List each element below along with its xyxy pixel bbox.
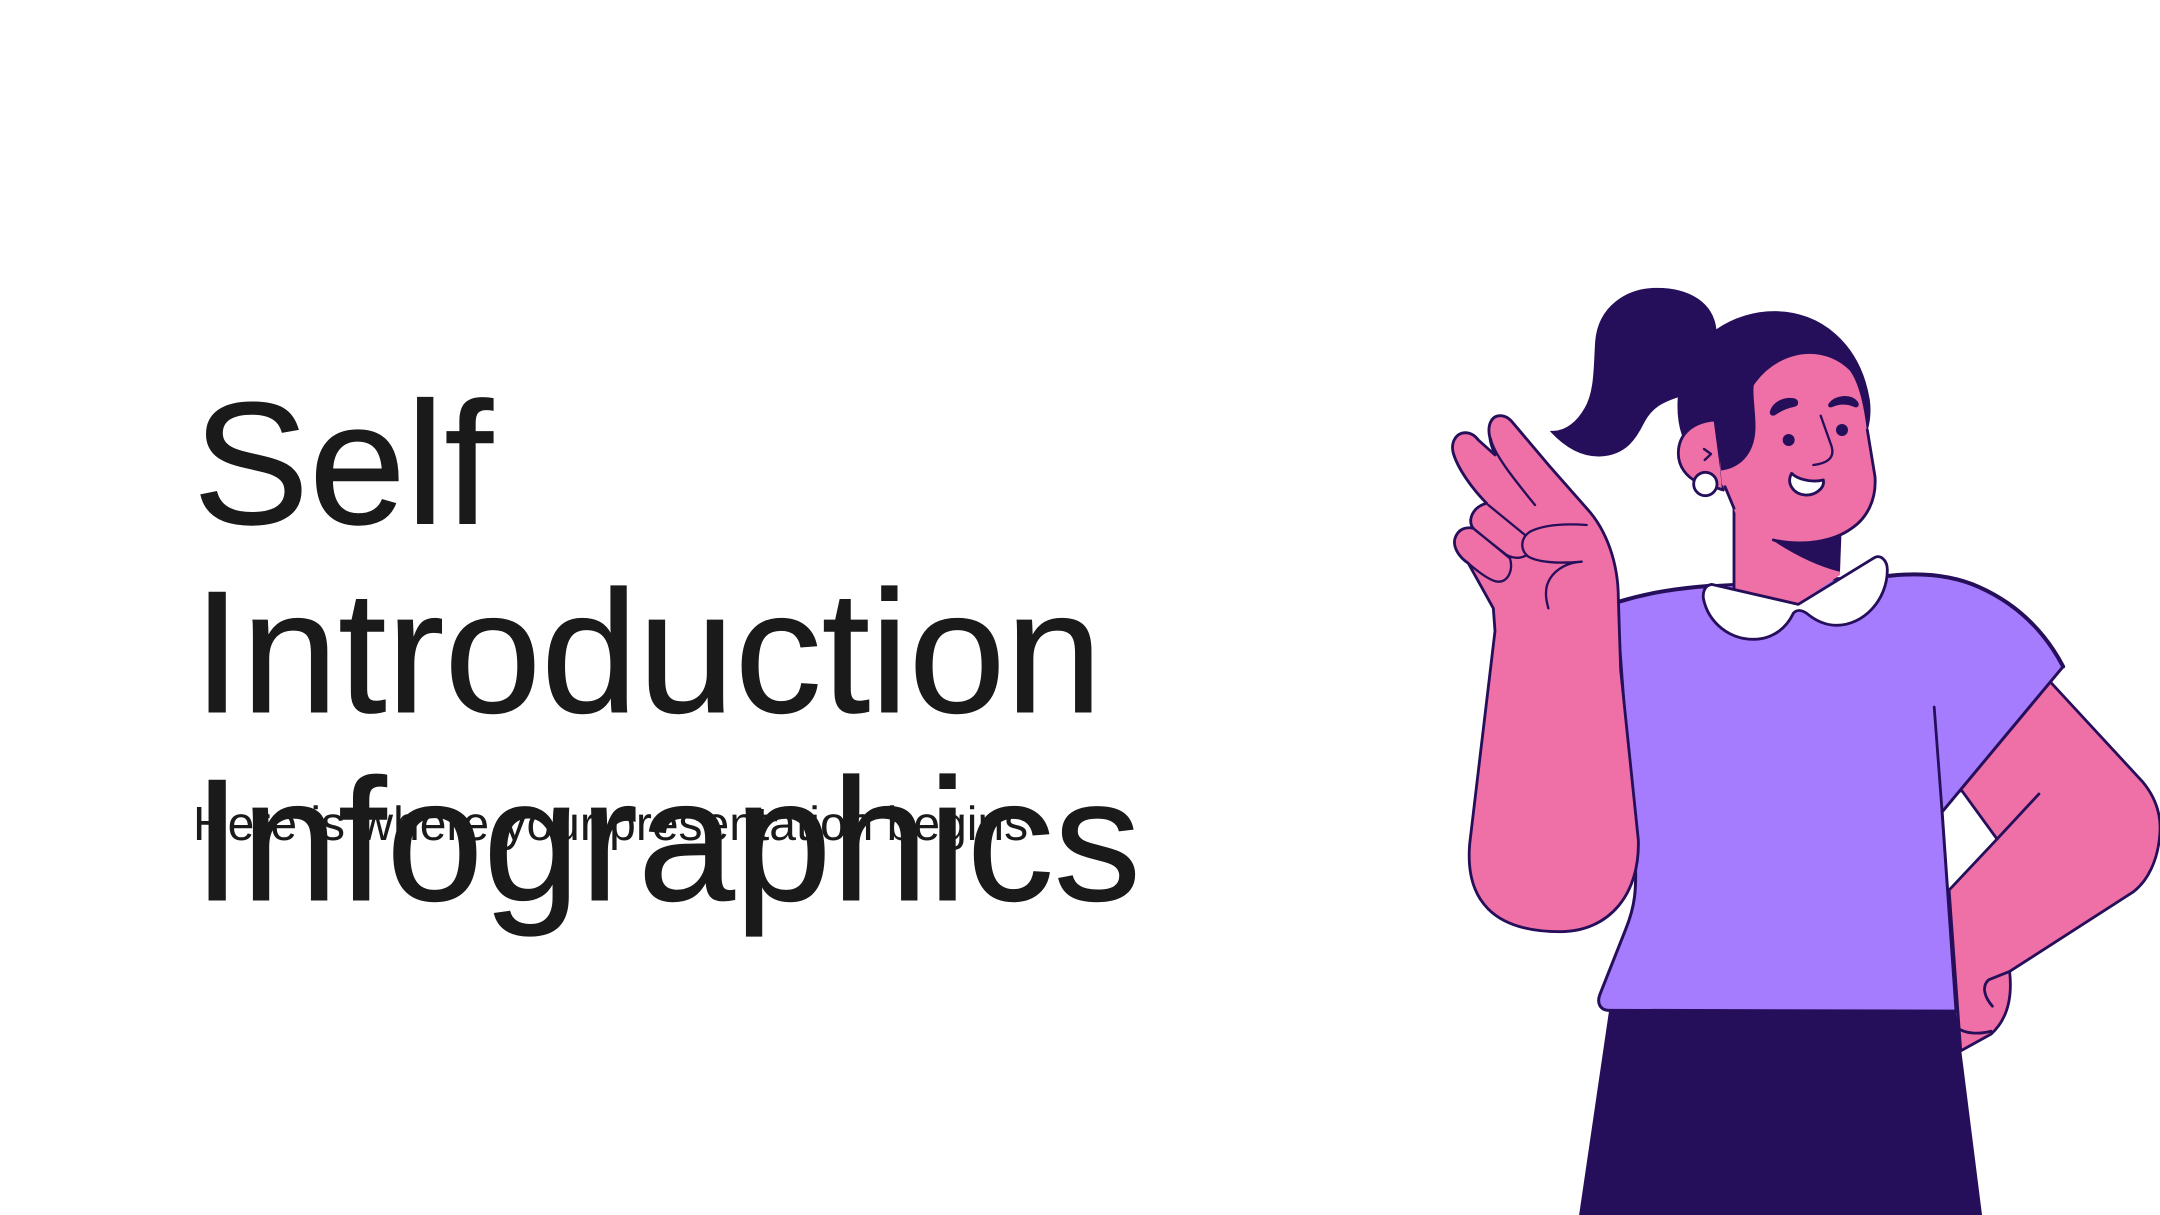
right arm on hip [1949, 679, 2160, 1051]
illustration: woman making a peace sign [1453, 288, 2160, 1215]
shoulder outlines [1619, 574, 2063, 667]
neck left edge [1730, 508, 1738, 590]
shirt seam [1934, 707, 1942, 812]
earring [1694, 472, 1717, 496]
neck shadow [1773, 537, 1841, 571]
title: Introduction [193, 554, 1102, 749]
raised arm and hand [1453, 416, 1638, 932]
eyes [1783, 424, 1848, 446]
mouth [1790, 473, 1824, 495]
ear detail [1704, 449, 1711, 460]
nose [1813, 416, 1832, 465]
eyebrows [1771, 397, 1858, 415]
collar [1703, 557, 1887, 639]
ear [1678, 420, 1723, 490]
face outline [1725, 430, 1875, 543]
shirt [1599, 574, 2063, 1011]
face [1717, 353, 1875, 543]
title: Self [193, 366, 493, 560]
neck [1734, 503, 1841, 605]
lower body: arm, skirt, shirt [1579, 574, 2160, 1215]
title: Infographics [193, 742, 1141, 937]
head, neck, collar and raised arm [1453, 288, 1887, 932]
hair and ponytail [1551, 288, 1870, 470]
skirt [1579, 1009, 1982, 1215]
subtitle: Here is where your presentation begins [193, 798, 1028, 851]
